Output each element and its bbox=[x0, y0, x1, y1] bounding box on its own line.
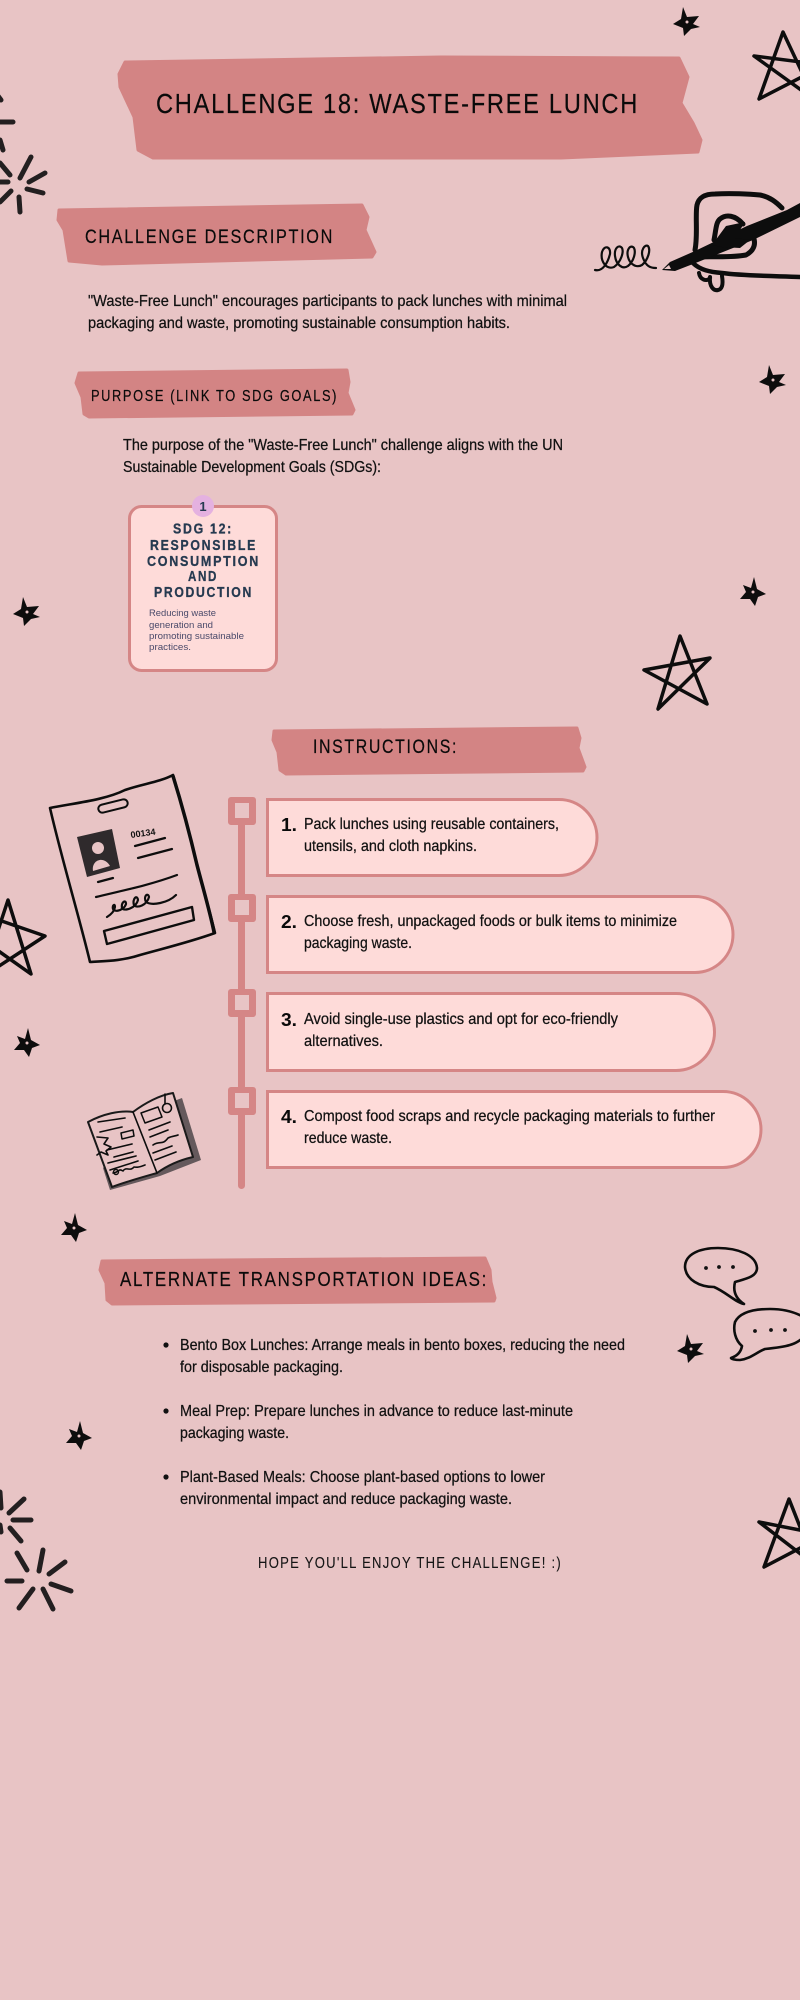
icon: speech bubble one bbox=[685, 1248, 757, 1304]
bulleted list: environmental impact and reduce packaging waste. bbox=[180, 1491, 512, 1508]
text block: challenge description: "Waste-Free Lunch" encourages participants to pack lunches with minimal bbox=[88, 293, 567, 310]
timeline bbox=[228, 797, 256, 1189]
closing message: HOPE YOU'LL ENJOY THE CHALLENGE! :) bbox=[258, 1555, 562, 1572]
SDG card description: practices. bbox=[149, 642, 191, 653]
step 3 bbox=[268, 994, 714, 1070]
step 1: Pack lunches using reusable containers, bbox=[304, 816, 559, 833]
step 1: 1. bbox=[281, 815, 297, 835]
heading: purpose: PURPOSE (LINK TO SDG GOALS) bbox=[91, 388, 338, 405]
step 3: alternatives. bbox=[304, 1033, 383, 1050]
step 1: utensils, and cloth napkins. bbox=[304, 838, 477, 855]
text block: purpose: The purpose of the "Waste-Free Lunch" challenge aligns with the UN bbox=[123, 437, 563, 454]
decorative small stars bbox=[13, 7, 786, 1450]
heading: purpose bbox=[76, 370, 354, 417]
decorative bursts bbox=[0, 96, 71, 1609]
heading: alternate ideas: ALTERNATE TRANSPORTATION IDEAS: bbox=[120, 1269, 488, 1291]
decorative outline stars bbox=[0, 32, 800, 1567]
bulleted list bbox=[163, 1337, 625, 1508]
SDG card title: SDG 12: bbox=[173, 522, 233, 538]
badge: number 1 bbox=[192, 495, 214, 517]
text block: purpose: Sustainable Development Goals (SDGs): bbox=[123, 459, 381, 476]
step 2: 2. bbox=[281, 912, 297, 932]
text block: challenge description: packaging and waste, promoting sustainable consumption habits. bbox=[88, 315, 510, 332]
SDG card description bbox=[149, 608, 244, 653]
heading: main title bbox=[119, 57, 701, 158]
icon: ID card sketch bbox=[50, 775, 215, 962]
heading: instructions: INSTRUCTIONS: bbox=[313, 736, 458, 758]
heading: challenge description: CHALLENGE DESCRIPTION bbox=[85, 226, 334, 248]
heading: main title: CHALLENGE 18: WASTE-FREE LUNCH bbox=[156, 88, 639, 119]
step 4: Compost food scraps and recycle packaging materials to further bbox=[304, 1108, 716, 1125]
bulleted list: Meal Prep: Prepare lunches in advance to reduce last-minute bbox=[180, 1403, 573, 1420]
SDG card title: AND bbox=[188, 569, 218, 585]
SDG card title: CONSUMPTION bbox=[147, 554, 260, 570]
bulleted list: Plant-Based Meals: Choose plant-based options to lower bbox=[180, 1469, 546, 1486]
SDG card description: generation and bbox=[149, 620, 213, 631]
heading: challenge description bbox=[58, 205, 375, 264]
bulleted list: for disposable packaging. bbox=[180, 1359, 343, 1376]
SDG card description: Reducing waste bbox=[149, 608, 216, 619]
step 2: packaging waste. bbox=[304, 935, 412, 952]
text block: purpose bbox=[123, 437, 563, 476]
heading: instructions bbox=[273, 728, 585, 774]
badge: number 1: 1 bbox=[199, 499, 207, 514]
step 1 bbox=[268, 800, 597, 876]
step 4: reduce waste. bbox=[304, 1130, 392, 1147]
icon: hand writing with pen bbox=[595, 194, 800, 290]
bulleted list: Bento Box Lunches: Arrange meals in bento boxes, reducing the need bbox=[180, 1337, 625, 1354]
text block: challenge description bbox=[88, 293, 567, 332]
panel: SDG 12 card bbox=[130, 495, 276, 670]
SDG card title bbox=[147, 522, 260, 601]
step 4 bbox=[268, 1092, 761, 1168]
bulleted list: packaging waste. bbox=[180, 1425, 289, 1442]
SDG card title: PRODUCTION bbox=[154, 585, 253, 601]
step 3: 3. bbox=[281, 1010, 297, 1030]
step 4: 4. bbox=[281, 1107, 297, 1127]
SDG card title: RESPONSIBLE bbox=[150, 538, 257, 554]
heading: alternate ideas bbox=[100, 1258, 495, 1304]
icon: speech bubble two bbox=[731, 1309, 800, 1360]
icon: ID card sketch: 00134 bbox=[130, 827, 156, 840]
SDG card description: promoting sustainable bbox=[149, 631, 244, 642]
step 2: Choose fresh, unpackaged foods or bulk items to minimize bbox=[304, 913, 677, 930]
icon: open book sketch bbox=[88, 1093, 201, 1190]
step 2 bbox=[268, 896, 733, 972]
step 3: Avoid single-use plastics and opt for eco-friendly bbox=[304, 1011, 618, 1028]
